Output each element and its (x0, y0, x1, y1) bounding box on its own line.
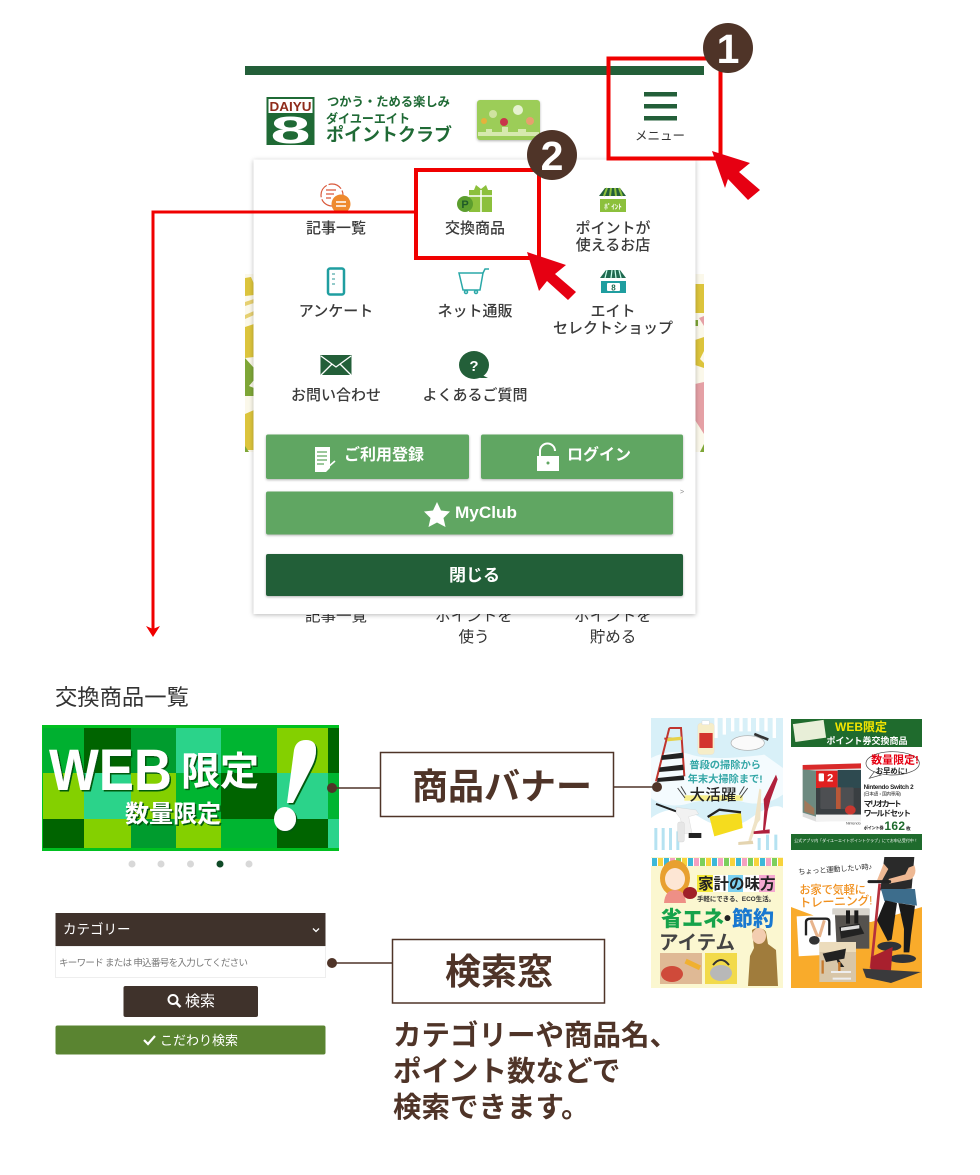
description text (393, 1019, 678, 1124)
thumbnail: training stepper: トレーニング! (799, 892, 873, 910)
thumbnail: cleaning: 普段の掃除から (689, 759, 761, 772)
button: MyClub: MyClub (455, 503, 517, 522)
thumbnail: switch 2 product: Nintendo Switch 2 (864, 784, 914, 791)
search: advanced button: こだわり検索 (160, 1033, 238, 1048)
panel: dropdown menu (254, 160, 696, 614)
icon: question bubble: ? (469, 358, 479, 375)
connector: label to thumbnails (614, 782, 662, 792)
thumbnail: switch 2 footer (791, 834, 922, 850)
background page labels behind menu: 使う (458, 628, 490, 646)
small chevron: > (680, 489, 684, 496)
button: close: 閉じる (449, 566, 500, 585)
thumbnail: switch 2 product: (日本語・国内専用) (864, 791, 901, 798)
label: point stores: ポイントが (575, 219, 651, 237)
menu button: hamburger (635, 92, 685, 143)
label box: product banner: 商品バナー (412, 766, 592, 807)
thumbnail: switch 2 product: 162 (884, 819, 905, 833)
background page labels behind menu: ポイントを (435, 607, 513, 625)
background page labels behind menu: 貯める (590, 628, 636, 646)
thumbnail: switch 2 product: 2 (827, 773, 833, 785)
thumbnail: eco items: 節約 (732, 907, 774, 931)
logo text: point club (326, 94, 452, 145)
connector: search to label (327, 958, 392, 968)
search: keyword input (56, 946, 326, 978)
label: eight select shop: セレクトショップ (553, 320, 673, 337)
search: category select (56, 913, 326, 946)
badge 1: 1 (717, 26, 739, 72)
search: submit button: 検索 (185, 993, 215, 1010)
icon: shopping cart (459, 269, 489, 294)
label: online shop: ネット通販 (437, 303, 513, 320)
logo: DAIYU 8 (266, 97, 314, 152)
icon: smartphone (328, 268, 344, 294)
highlight box 2: exchange items (416, 170, 539, 258)
description text: カテゴリーや商品名、 (393, 1019, 678, 1052)
icon: eight select shop (600, 270, 626, 293)
thumbnail: switch 2 footer: 公式アプリ内「ダイユーエイトポイントクラブ」にてお申込受付中！ (794, 837, 918, 843)
label box: product banner (380, 752, 614, 816)
button: registration: ご利用登録 (344, 445, 424, 464)
thumbnail: eco items: 省エネ (661, 908, 724, 931)
badge 1 (703, 23, 753, 73)
logo text: point club: ダイユーエイト (326, 111, 410, 126)
background page labels behind menu: ポイントを (574, 607, 652, 625)
label box: search window: 検索窓 (445, 951, 553, 992)
logo text: point club: ポイントクラブ (326, 124, 452, 145)
background page decoration right (695, 274, 704, 452)
label: survey: アンケート (299, 303, 373, 320)
search: category select: カテゴリー (63, 921, 130, 937)
thumbnail: training stepper: ちょっと運動したい時♪ (798, 862, 872, 876)
heading: product list: 交換商品一覧 (55, 685, 189, 710)
thumbnail: switch 2 product: マリオカート (864, 799, 902, 808)
thumbnail: eco items (651, 857, 783, 988)
description text: ポイント数などで (393, 1056, 620, 1088)
thumbnail: switch 2 product: ポイント券 (864, 824, 884, 831)
thumbnail: eco items: 手軽にできる、ECO生活。 (697, 894, 775, 903)
icon: gift with point: P (461, 199, 469, 211)
label: point stores (575, 219, 651, 254)
label: eight select shop (553, 303, 673, 337)
thumbnail: switch 2 product: Nintendo (846, 822, 861, 826)
header bar (245, 66, 704, 75)
label: eight select shop: エイト (590, 303, 636, 320)
thumbnail: switch 2 product: 数量限定! (871, 753, 919, 767)
background page labels behind menu (305, 607, 652, 646)
icon: gift with point (457, 185, 492, 212)
thumbnail: eco items: ・ (717, 908, 738, 931)
banner: web limited: WEB (49, 738, 172, 803)
search: keyword input: キーワード または 申込番号を入力してください (59, 957, 248, 969)
thumbnail: eco items: アイテム (659, 932, 735, 954)
thumbnail: training stepper: お家で気軽に (799, 883, 866, 897)
label box: search window (392, 940, 604, 1003)
logo text: point club: つかう・ためる楽しみ (327, 94, 450, 109)
thumbnail: switch 2 product: お早めに! (876, 767, 908, 776)
description text: 検索できます。 (393, 1092, 590, 1124)
badge 2 (527, 130, 577, 180)
button: close (266, 554, 683, 596)
background page labels behind menu: 記事一覧 (305, 607, 367, 625)
button: login: ログイン (567, 445, 631, 464)
point card (477, 100, 540, 140)
menu button: hamburger: メニュー (635, 129, 685, 143)
thumbnail: switch 2 product: 枚 (906, 825, 911, 832)
thumbnail: cleaning: 大活躍 (690, 787, 736, 804)
label: point stores: 使えるお店 (576, 237, 650, 254)
icon: store: ﾎﾟｲﾝﾄ (604, 203, 622, 211)
thumbnail: cleaning (651, 718, 783, 850)
arrow: connector to product list (146, 212, 416, 637)
icon: eight select shop: 8 (611, 284, 616, 292)
button: login (481, 434, 683, 479)
search: submit button (124, 986, 258, 1017)
logo: DAIYU 8: 8 (270, 110, 310, 152)
icon: article list (321, 184, 350, 214)
banner: web limited (42, 725, 339, 851)
banner: web limited: 数量限定 (125, 801, 221, 828)
thumbnail: cleaning: 年末大掃除まで! (688, 773, 763, 786)
icon: store (599, 188, 626, 212)
carousel dots (128, 860, 252, 868)
icon: envelope (320, 355, 352, 375)
thumbnail: training stepper (791, 857, 922, 988)
badge 2: 2 (541, 133, 563, 179)
thumbnail: switch 2 product (803, 752, 919, 833)
connector: banner to label (327, 783, 380, 793)
background page decoration left (245, 274, 254, 452)
search: advanced button (56, 1026, 326, 1054)
thumbnail: switch 2 product: ワールド セット (864, 809, 911, 818)
thumbnail: eco items: 家計の味方 (698, 874, 776, 893)
arrow: pointer to exchange items (527, 252, 576, 300)
thumbnail: switch 2 header: ポイント券交換商品 (826, 735, 908, 746)
label: article list: 記事一覧 (306, 220, 366, 237)
label: contact: お問い合わせ (291, 387, 381, 404)
button: MyClub (266, 492, 673, 534)
logo: DAIYU 8: DAIYU (270, 100, 312, 114)
highlight box 1: menu (608, 58, 720, 158)
banner: web limited: 限定 (181, 751, 259, 794)
label: FAQ: よくあるご質問 (422, 386, 528, 404)
thumbnail: switch 2 header: WEB限定 (835, 720, 887, 734)
button: registration (266, 434, 469, 479)
icon: question bubble (459, 351, 489, 379)
label: exchange items: 交換商品 (445, 219, 505, 237)
arrow: pointer to menu (712, 151, 760, 200)
thumbnail: switch 2 header (791, 719, 922, 747)
